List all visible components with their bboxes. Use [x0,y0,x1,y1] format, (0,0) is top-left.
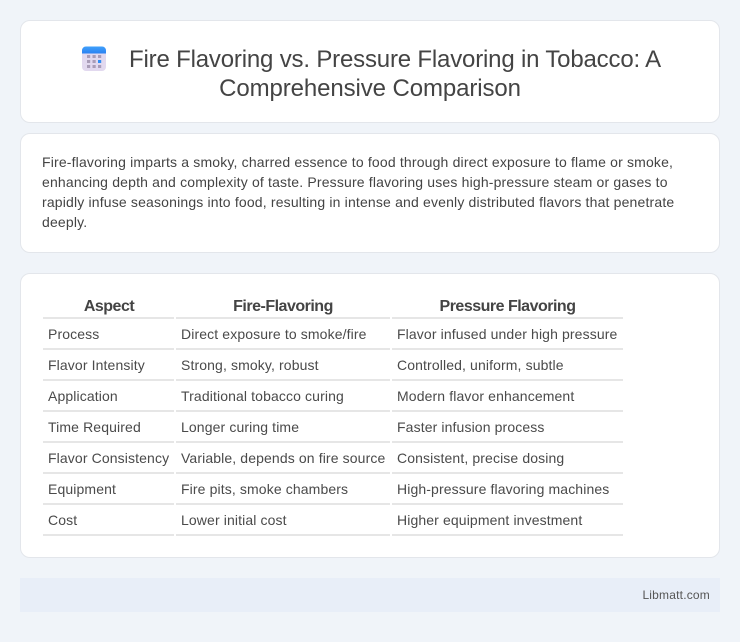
intro text: deeply. [42,214,87,230]
title: Fire Flavoring vs. Pressure Flavoring in Tobacco: A [129,46,661,73]
intro text: enhancing depth and complexity of taste. Pressure flavoring uses high-pressure steam or gases to [42,174,668,190]
row: application: Traditional tobacco curing [181,388,344,404]
row: flavor intensity [43,357,623,381]
row: cost: Higher equipment investment [397,512,582,528]
panel: introduction [20,133,720,253]
row: application: Modern flavor enhancement [397,388,574,404]
row: application: Application [48,388,118,404]
table header: Aspect [84,298,134,315]
row: process: Flavor infused under high pressure [397,326,617,342]
table header: Pressure Flavoring [440,298,575,315]
row: flavor intensity: Strong, smoky, robust [181,357,319,373]
row: flavor consistency [43,450,623,474]
row: cost: Lower initial cost [181,512,287,528]
intro text: rapidly infuse seasonings into food, resulting in intense and evenly distributed flavors that penetrate [42,194,674,210]
row: time required: Longer curing time [181,419,299,435]
row: equipment: Fire pits, smoke chambers [181,481,348,497]
row: time required [43,419,623,443]
footer credit: Libmatt.com [642,588,710,602]
row: process: Process [48,326,99,342]
row: time required: Faster infusion process [397,419,544,435]
row: flavor consistency: Flavor Consistency [48,450,169,466]
icon: calendar [82,46,106,71]
row: process: Direct exposure to smoke/fire [181,326,367,342]
title: Comprehensive Comparison [219,75,521,102]
row: flavor intensity: Flavor Intensity [48,357,145,373]
row: flavor consistency: Variable, depends on fire source [181,450,385,466]
row: time required: Time Required [48,419,141,435]
intro text [42,154,674,230]
intro text: Fire-flavoring imparts a smoky, charred essence to food through direct exposure to flame or smoke, [42,154,673,170]
row: equipment: Equipment [48,481,116,497]
row: flavor consistency: Consistent, precise dosing [397,450,564,466]
table header: Fire-Flavoring [233,298,333,315]
table header [43,298,623,319]
footer bar [20,578,720,612]
title [129,46,661,102]
row: equipment [43,481,623,505]
row: flavor intensity: Controlled, uniform, subtle [397,357,564,373]
row: application [43,388,623,412]
row: process [43,326,623,350]
panel: title card [20,20,720,123]
panel: comparison table [20,273,720,558]
row: cost: Cost [48,512,77,528]
row: cost [43,512,623,536]
row: equipment: High-pressure flavoring machines [397,481,609,497]
